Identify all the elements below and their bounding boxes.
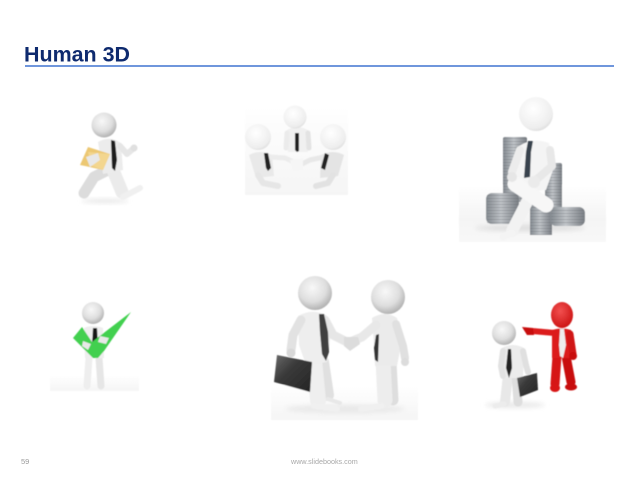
title: Human 3D [24,44,130,66]
figure: red man pointing at gray man [485,302,577,408]
briefcase [274,355,312,392]
gray man [492,321,538,406]
figure: man holding green check mark [50,302,139,391]
right man [350,280,409,409]
hands [344,337,360,351]
figure: three men joining hands [245,103,348,195]
left man [286,276,345,409]
coin stacks [486,137,585,235]
red man [522,302,577,392]
footer url: www.slidebooks.com [290,457,358,466]
figure: two men shaking hands [271,276,418,420]
figure: running man with envelope [80,112,140,203]
title rule [25,65,614,67]
page number: 59 [21,457,29,466]
figure: man sitting on coin stacks [459,97,606,242]
